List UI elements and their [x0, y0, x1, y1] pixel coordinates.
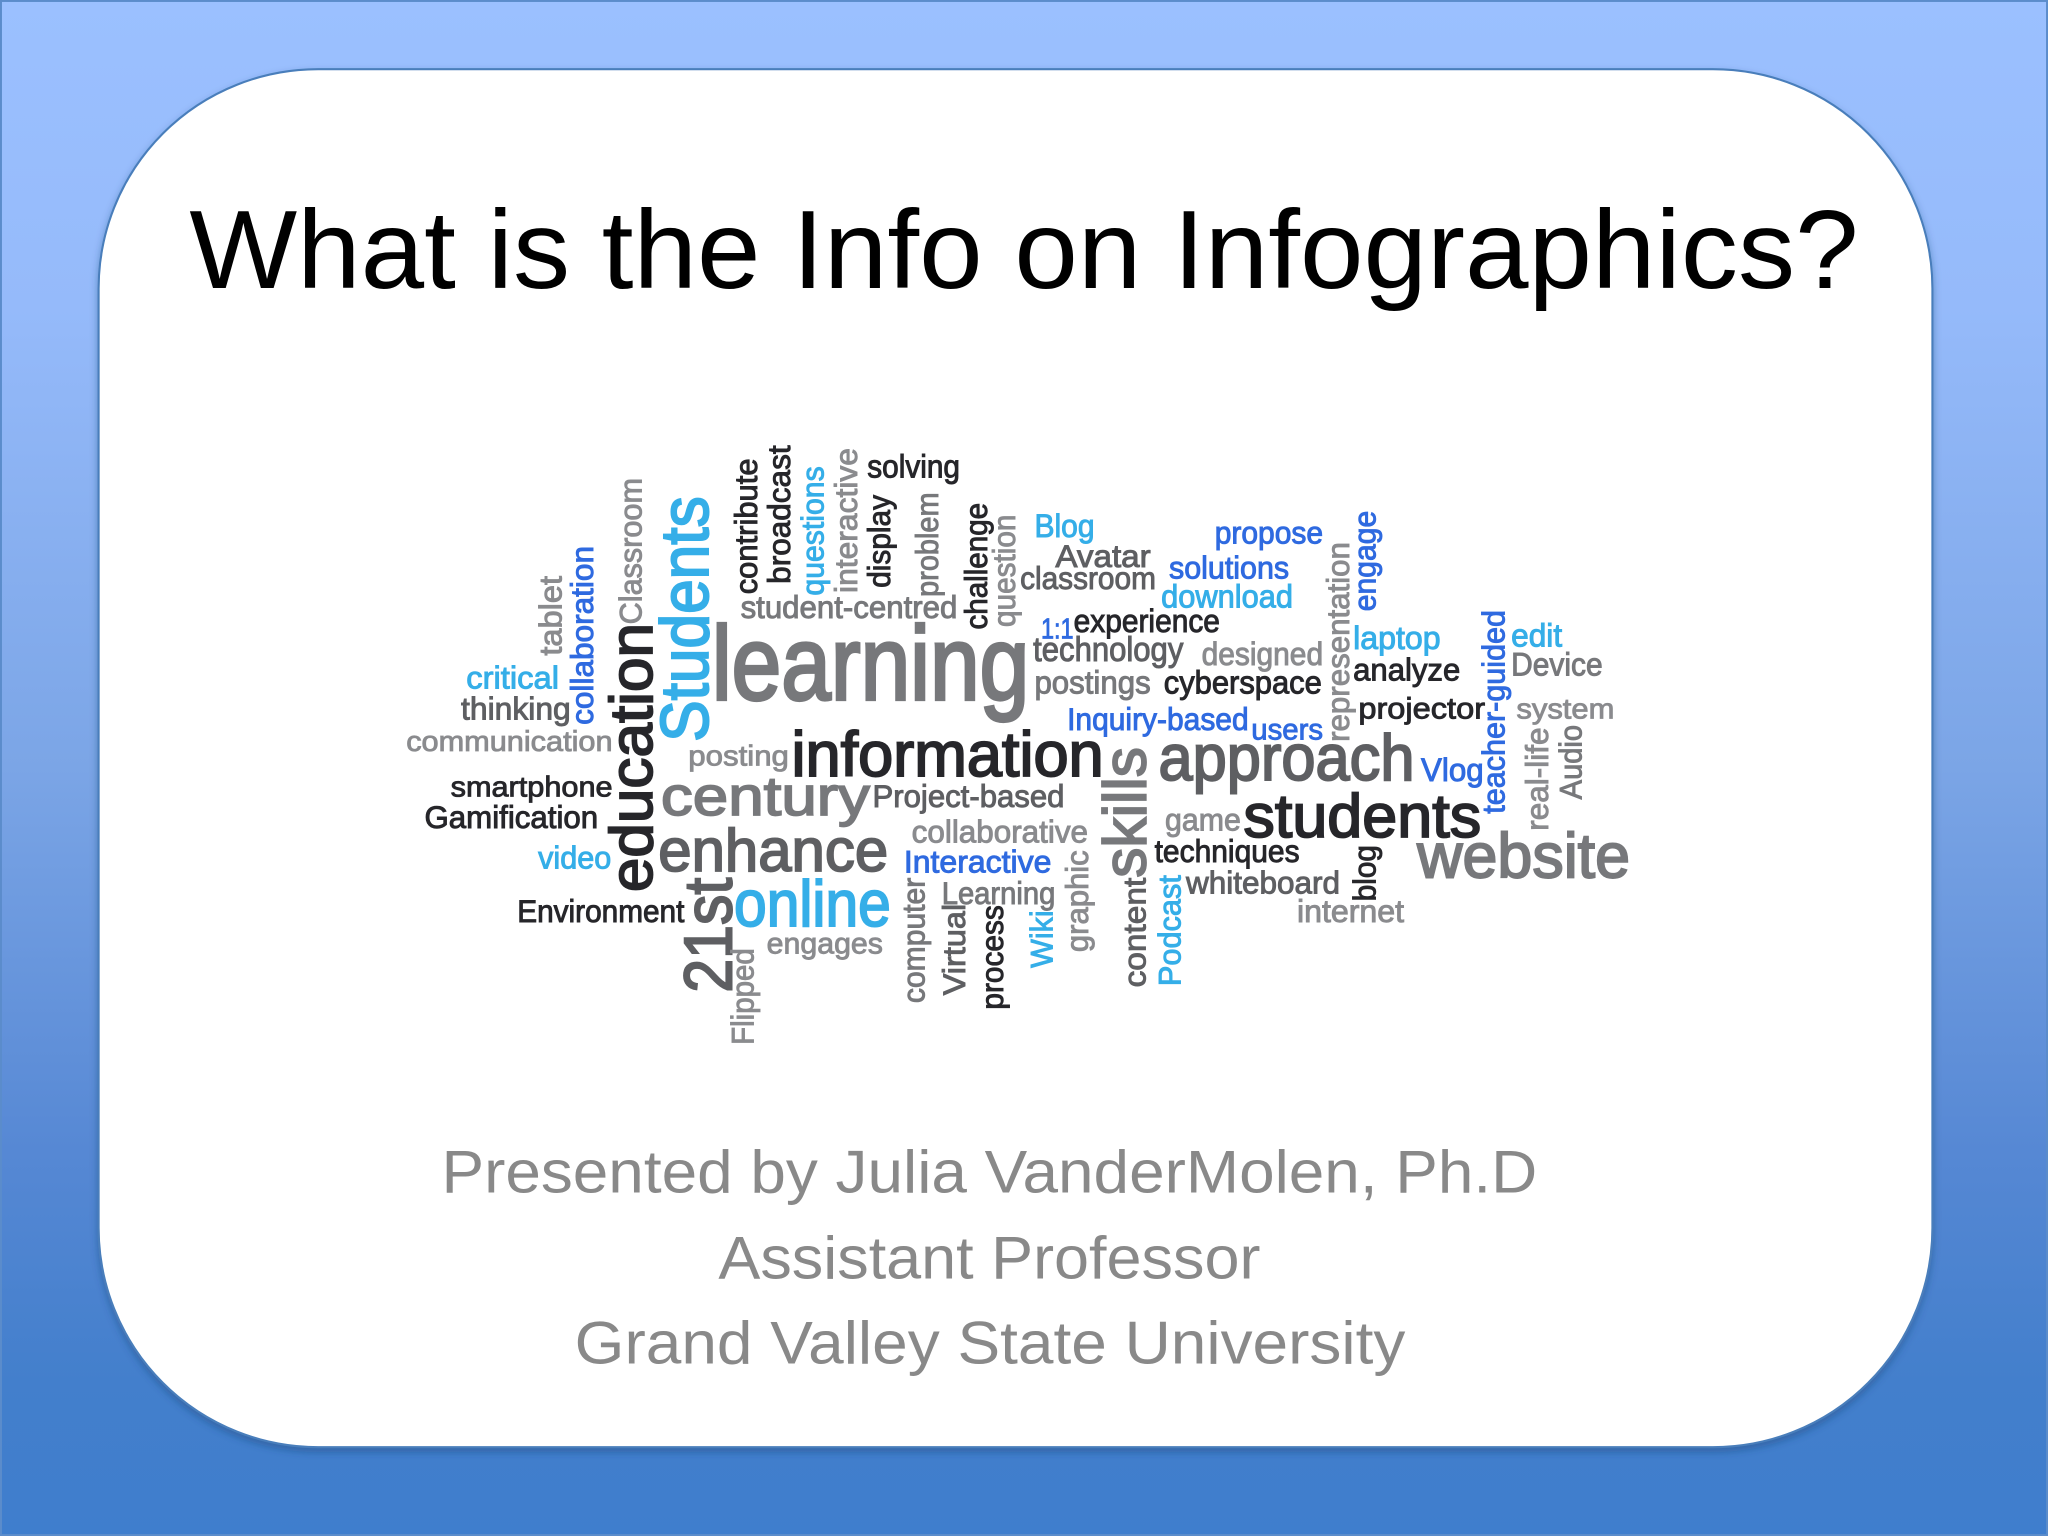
- vertical words: Audio: [1554, 725, 1589, 799]
- horizontal words: learning: [712, 605, 1029, 722]
- vertical words: Classroom: [613, 478, 648, 624]
- horizontal words: thinking: [461, 692, 571, 727]
- horizontal words: cyberspace: [1164, 664, 1322, 701]
- horizontal words: communication: [406, 726, 613, 758]
- horizontal words: game: [1165, 803, 1241, 838]
- vertical words: computer: [897, 878, 932, 1003]
- horizontal words: techniques: [1155, 834, 1300, 869]
- title: What is the Info on Infographics?: [189, 187, 1859, 312]
- vertical words: [534, 445, 1589, 1045]
- vertical words: problem: [910, 492, 945, 597]
- vertical words: education: [598, 623, 665, 892]
- horizontal words: postings: [1034, 664, 1151, 701]
- horizontal words: Vlog: [1421, 751, 1484, 788]
- vertical words: tablet: [534, 576, 569, 656]
- vertical words: engage: [1347, 511, 1382, 611]
- horizontal words: approach: [1159, 721, 1415, 794]
- horizontal words: technology: [1033, 631, 1183, 669]
- horizontal words: Environment: [517, 894, 685, 929]
- horizontal words: designed: [1202, 635, 1323, 672]
- horizontal words: website: [1416, 822, 1630, 892]
- vertical words: 21st: [671, 878, 746, 993]
- horizontal words: Gamification: [424, 800, 598, 835]
- presenter credits: [441, 1138, 1537, 1377]
- horizontal words: [406, 447, 1630, 960]
- horizontal words: Blog: [1034, 507, 1095, 544]
- horizontal words: 1:1: [1041, 614, 1074, 646]
- horizontal words: whiteboard: [1185, 865, 1340, 900]
- presenter credits: Assistant Professor: [718, 1225, 1260, 1292]
- horizontal words: students: [1243, 782, 1481, 851]
- horizontal words: system: [1516, 693, 1614, 725]
- horizontal words: laptop: [1353, 619, 1441, 656]
- vertical words: blog: [1347, 845, 1382, 901]
- horizontal words: classroom: [1020, 561, 1156, 596]
- horizontal words: users: [1251, 713, 1323, 746]
- vertical words: question: [987, 515, 1022, 627]
- vertical words: representation: [1321, 542, 1356, 742]
- horizontal words: posting: [688, 740, 789, 772]
- horizontal words: engages: [767, 927, 883, 960]
- horizontal words: edit: [1511, 617, 1562, 654]
- horizontal words: Avatar: [1055, 539, 1151, 574]
- horizontal words: internet: [1297, 894, 1404, 929]
- presenter credits: Presented by Julia VanderMolen, Ph.D: [441, 1138, 1537, 1205]
- horizontal words: Inquiry-based: [1067, 702, 1249, 737]
- horizontal words: Project-based: [872, 779, 1064, 814]
- horizontal words: download: [1161, 577, 1293, 614]
- vertical words: display: [862, 495, 897, 588]
- vertical words: Flipped: [726, 948, 761, 1045]
- horizontal words: Device: [1511, 645, 1603, 682]
- vertical words: content: [1117, 877, 1152, 987]
- horizontal words: century: [661, 765, 871, 827]
- vertical words: contribute: [729, 458, 764, 594]
- vertical words: broadcast: [762, 445, 797, 584]
- horizontal words: smartphone: [451, 772, 613, 804]
- horizontal words: experience: [1074, 602, 1220, 639]
- horizontal words: propose: [1215, 515, 1323, 550]
- vertical words: teacher-guided: [1477, 610, 1512, 814]
- horizontal words: projector: [1358, 692, 1485, 725]
- vertical words: collaboration: [565, 546, 600, 725]
- horizontal words: information: [792, 720, 1104, 790]
- horizontal words: student-centred: [741, 590, 957, 625]
- vertical words: skills: [1091, 747, 1158, 878]
- vertical words: Students: [648, 496, 723, 742]
- vertical words: questions: [796, 466, 831, 596]
- vertical words: Podcast: [1153, 875, 1188, 986]
- horizontal words: online: [734, 867, 891, 940]
- vertical words: graphic: [1060, 850, 1095, 952]
- horizontal words: critical: [466, 660, 559, 695]
- vertical words: Virtual: [937, 904, 972, 995]
- horizontal words: Interactive: [904, 844, 1051, 879]
- presenter credits: Grand Valley State University: [575, 1310, 1405, 1377]
- horizontal words: video: [538, 841, 611, 876]
- vertical words: real-life: [1520, 728, 1555, 831]
- word cloud: [406, 445, 1630, 1045]
- vertical words: challenge: [959, 503, 994, 630]
- horizontal words: collaborative: [912, 814, 1088, 849]
- horizontal words: enhance: [658, 817, 888, 884]
- horizontal words: solving: [867, 447, 960, 484]
- vertical words: Wiki: [1025, 910, 1060, 968]
- horizontal words: Learning: [942, 876, 1055, 911]
- horizontal words: solutions: [1169, 551, 1289, 586]
- vertical words: process: [975, 905, 1010, 1010]
- vertical words: interactive: [829, 448, 864, 593]
- horizontal words: analyze: [1353, 652, 1460, 687]
